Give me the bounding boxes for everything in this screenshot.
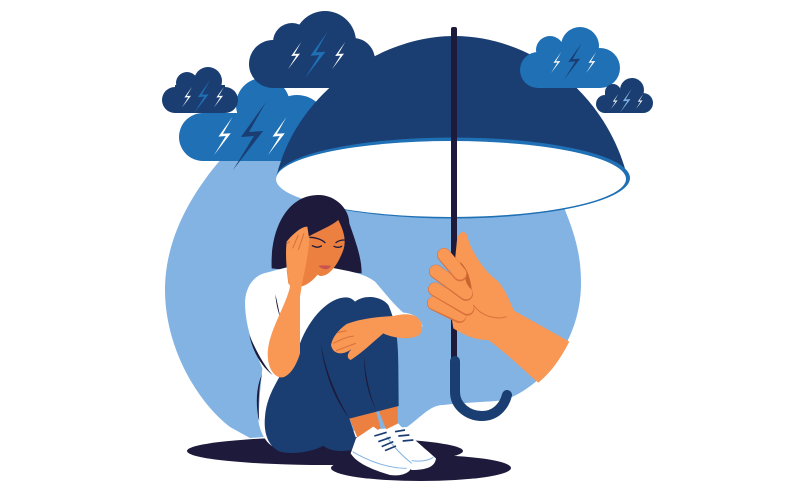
eyes and brows <box>310 237 344 247</box>
woman <box>245 195 436 475</box>
cloud: small left dark <box>162 67 238 113</box>
hair <box>272 195 362 273</box>
helping hand <box>434 232 569 383</box>
arm on knee <box>331 314 422 360</box>
ground shadows <box>187 437 511 481</box>
ankles <box>349 405 398 440</box>
umbrella inner <box>276 141 626 217</box>
trouser folds <box>321 343 376 419</box>
cloud: small right dark <box>596 78 653 113</box>
umbrella handle <box>455 361 507 416</box>
cloud: large blue <box>179 78 327 170</box>
cloud: top right blue <box>520 27 620 88</box>
finger lines <box>287 233 304 250</box>
lips <box>318 265 331 269</box>
cloud: top centre dark <box>249 11 375 88</box>
knee hand lines <box>333 331 356 351</box>
arm on head <box>268 227 309 377</box>
umbrella canopy <box>277 36 626 174</box>
background blob <box>165 140 581 438</box>
shirt <box>245 267 423 447</box>
front shoe <box>351 427 412 475</box>
shirt folds <box>249 294 281 422</box>
thumb shadow <box>460 262 472 292</box>
umbrella shaft <box>451 27 457 362</box>
fingers <box>434 255 467 316</box>
face <box>303 220 345 276</box>
neck <box>287 247 317 287</box>
back shoe <box>386 423 436 470</box>
umbrella rim <box>276 138 630 218</box>
forearm and palm <box>447 232 569 383</box>
palm crease <box>473 305 507 318</box>
trousers <box>265 297 399 453</box>
